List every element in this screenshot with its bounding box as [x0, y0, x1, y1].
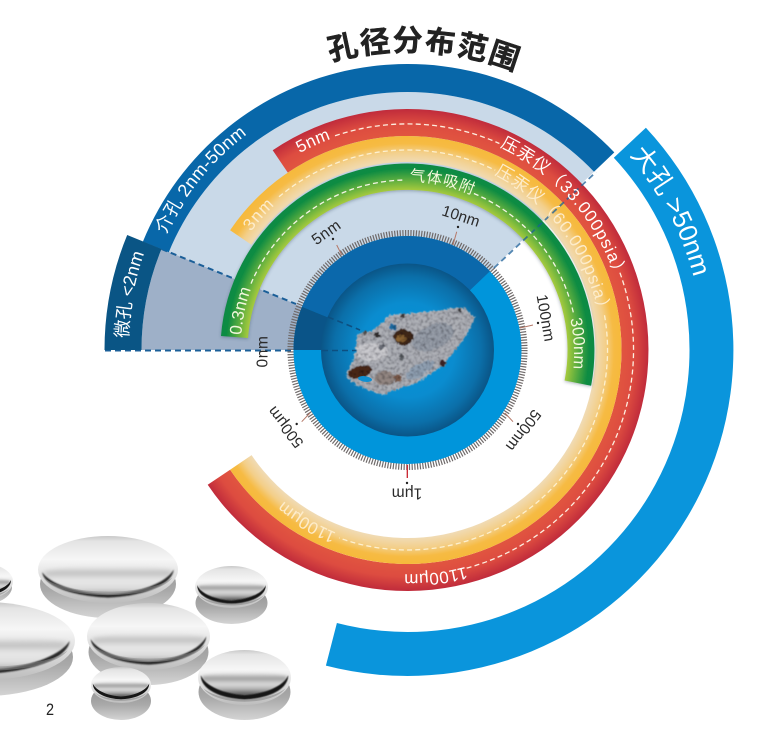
page number: 2 [46, 701, 54, 719]
droplet top large [38, 536, 178, 618]
major ticks and dots [296, 226, 539, 484]
scale tick ring [291, 233, 524, 467]
scale labels: 500μm [265, 403, 307, 451]
band label: macropore: 大孔 >50nm [630, 147, 706, 276]
panel: mesopore sector [169, 92, 594, 350]
dashed lines to the rock [322, 317, 360, 350]
ring: mercury porosimetry 60,000 psia [230, 136, 621, 564]
band: mesopore [143, 64, 614, 252]
red ring labels: 5nm [296, 132, 330, 152]
yellow ring labels: 压汞仪（60.000psia） [494, 164, 610, 304]
droplet top right [195, 566, 268, 624]
mercury droplets [0, 536, 291, 720]
ring: mercury porosimetry 33,000 psia [208, 109, 648, 591]
translucent dashed boundary across the rings [494, 172, 596, 268]
scale labels: 0nm [254, 336, 272, 367]
band label: micropore: 微孔 <2nm [113, 252, 144, 338]
green ring labels: 0.3nm [230, 288, 251, 334]
droplet small bottom [91, 667, 151, 720]
band: macropore [326, 128, 733, 676]
central disk [294, 236, 522, 464]
scale labels: 10nm [440, 203, 482, 231]
scale labels: 100nm [533, 293, 557, 343]
droplet centre [87, 603, 210, 685]
yellow ring labels: 3nm [243, 200, 274, 230]
icon: porous rock [346, 307, 475, 395]
ring: gas adsorption [221, 164, 594, 386]
droplet bottom right [198, 650, 291, 720]
band label: mesopore: 介孔 2nm-50nm [156, 128, 246, 234]
green ring labels: 300nm [570, 318, 585, 368]
droplet far left small [0, 563, 13, 605]
red ring labels: 压汞仪（33.000psia） [500, 136, 625, 268]
scale labels: 5nm [309, 217, 345, 249]
droplet left large [0, 602, 75, 696]
scale labels: 1μm [392, 484, 422, 502]
band: micropore [104, 235, 162, 350]
dashed range lines [251, 124, 634, 568]
red ring labels: 1100μm [405, 567, 466, 585]
yellow ring labels [243, 164, 610, 542]
green ring labels [230, 168, 585, 368]
yellow ring labels: 1100μm [280, 502, 336, 542]
icon: hole through the rock [358, 375, 372, 383]
green ring labels: 气体吸附 [410, 168, 475, 195]
red ring labels [296, 132, 625, 585]
title: 孔径分布范围 [326, 26, 522, 73]
panel: micropore sector [142, 249, 408, 350]
scale labels [254, 203, 557, 502]
scale labels: 500nm [502, 406, 544, 454]
dashed boundary lines of the micropore sector [105, 249, 296, 350]
